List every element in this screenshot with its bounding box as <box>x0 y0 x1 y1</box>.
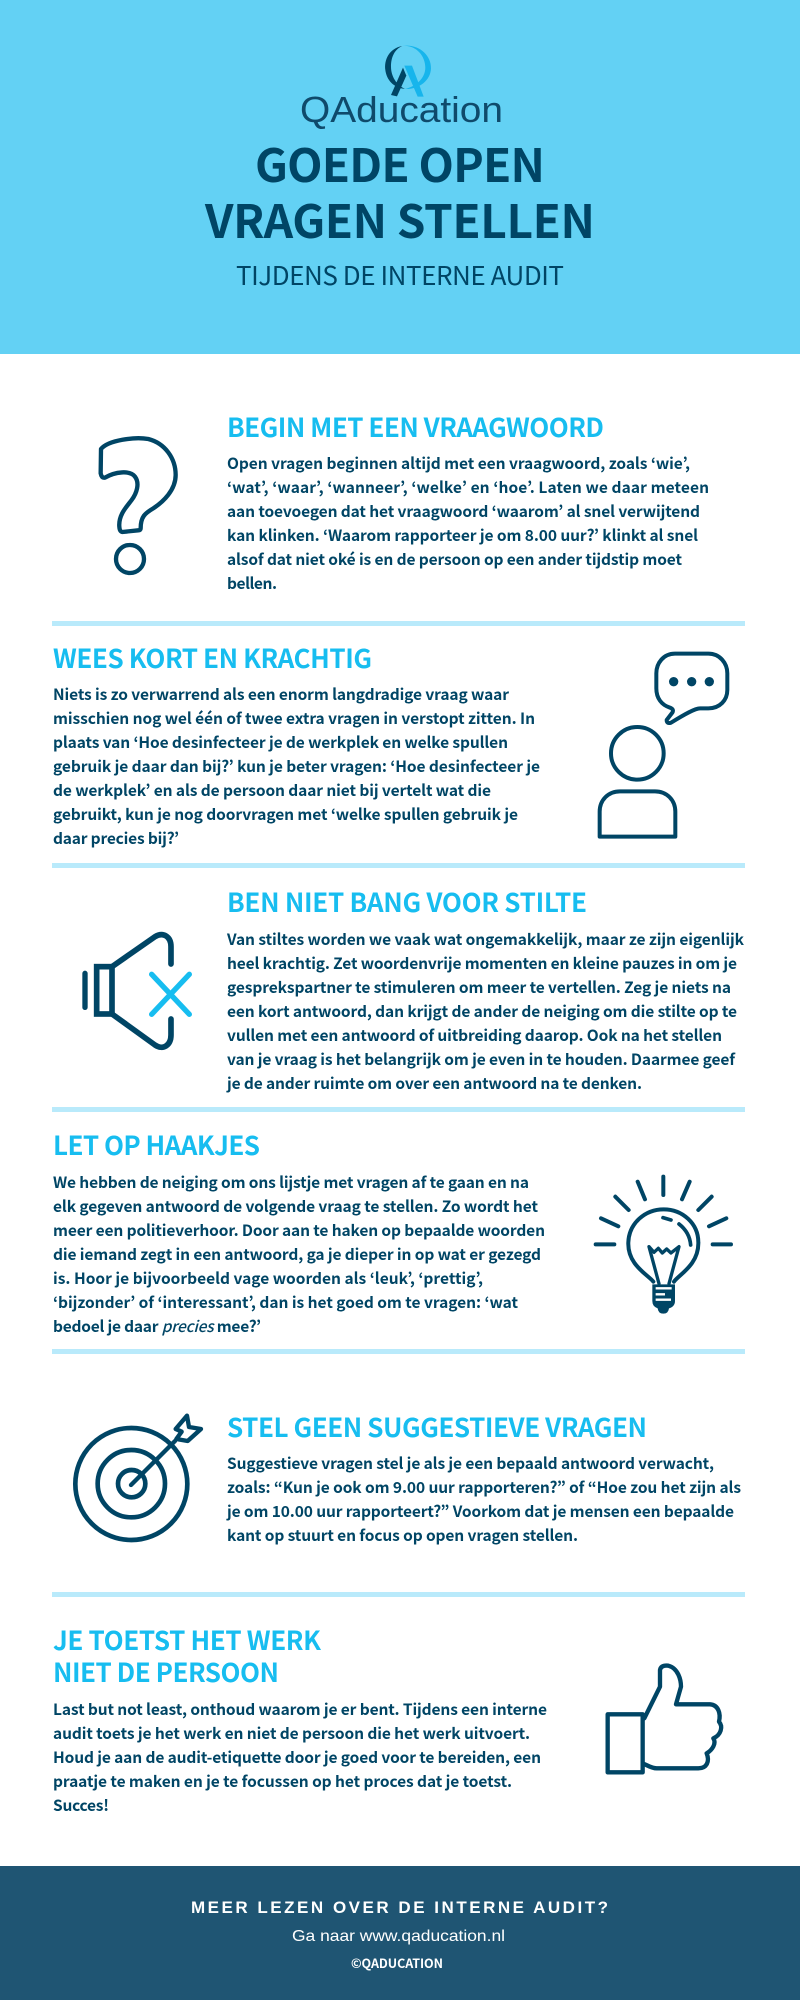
body text: Niets is zo verwarrend als een enorm langdradige vraag waar <box>53 683 509 705</box>
body text: audit toets je het werk en niet de persoon die het werk uitvoert. <box>53 1722 530 1744</box>
title <box>204 130 595 252</box>
body text: zoals: “Kun je ook om 9.00 uur rapporteren?” of “Hoe zou het zijn als <box>227 1476 741 1498</box>
heading <box>53 1621 321 1690</box>
icon: target with arrow <box>75 1416 201 1540</box>
body text: ‘bijzonder’ of ‘interessant’, dan is het goed om te vragen: ‘wat <box>53 1291 518 1313</box>
body text: alsof dat niet oké is en de persoon op een ander tijdstip moet <box>227 548 682 570</box>
body text: ‘wat’, ‘waar’, ‘wanneer’, ‘welke’ en ‘hoe’. Laten we daar meteen <box>227 476 709 498</box>
body text: van je vraag is het belangrijk om je even in te houden. Daarmee geef <box>227 1048 736 1070</box>
body text: meer een politieverhoor. Door aan te haken op bepaalde woorden <box>53 1219 545 1241</box>
body text: kan klinken. ‘Waarom rapporteer je om 8.00 uur?’ klinkt al snel <box>227 524 698 546</box>
body text: een kort antwoord, dan krijgt de ander de neiging om die stilte op te <box>227 1000 737 1022</box>
body text <box>53 683 540 849</box>
body text: Suggestieve vragen stel je als je een bepaald antwoord verwacht, <box>227 1452 714 1474</box>
title: VRAGEN STELLEN <box>204 186 595 252</box>
body text: de werkplek’ en als de persoon daar niet bij vertelt wat die <box>53 779 491 801</box>
body text: je om 10.00 uur rapporteert?” Voorkom dat je mensen een bepaalde <box>226 1500 734 1522</box>
body text: Open vragen beginnen altijd met een vraagwoord, zoals ‘wie’, <box>227 452 690 474</box>
heading: NIET DE PERSOON <box>53 1653 279 1690</box>
heading: BEN NIET BANG VOOR STILTE <box>227 883 587 920</box>
heading: LET OP HAAKJES <box>53 1126 260 1163</box>
icon: thumbs up <box>608 1666 721 1772</box>
body text: je de ander ruimte om over een antwoord na te denken. <box>226 1072 642 1094</box>
subtitle: TIJDENS DE INTERNE AUDIT <box>236 256 564 293</box>
body text: Succes! <box>53 1794 109 1816</box>
icon: muted speaker <box>85 935 189 1047</box>
panel: stel geen suggestieve vragen <box>75 1408 741 1546</box>
panel: header <box>0 0 800 354</box>
body text: plaats van ‘Hoe desinfecteer je de werkplek en welke spullen <box>53 731 508 753</box>
body text: elk gegeven antwoord de volgende vraag te stellen. Zo wordt het <box>53 1195 538 1217</box>
panel: wees kort en krachtig <box>53 639 727 849</box>
icon: question mark <box>101 438 176 573</box>
title: GOEDE OPEN <box>255 130 545 196</box>
body text <box>53 1698 547 1816</box>
body text: Houd je aan de audit-etiquette door je goed voor te bereiden, een <box>53 1746 541 1768</box>
body text: praatje te maken en je te focussen op het proces dat je toetst. <box>53 1770 512 1792</box>
body text: Last but not least, onthoud waarom je er bent. Tijdens een interne <box>53 1698 547 1720</box>
panel: je toetst het werk niet de persoon <box>53 1621 721 1816</box>
body text: daar precies bij?’ <box>53 827 179 849</box>
body text: aan toevoegen dat het vraagwoord ‘waarom’ al snel verwijtend <box>227 500 700 522</box>
panel: begin met een vraagwoord <box>101 408 709 594</box>
body text: Van stiltes worden we vaak wat ongemakkelijk, maar ze zijn eigenlijk <box>226 928 745 950</box>
body text: We hebben de neiging om ons lijstje met vragen af te gaan en na <box>53 1171 529 1193</box>
heading: STEL GEEN SUGGESTIEVE VRAGEN <box>227 1408 647 1445</box>
logo: QAducation: QAducation <box>300 89 503 130</box>
heading: WEES KORT EN KRACHTIG <box>53 639 372 676</box>
body text <box>53 1171 545 1337</box>
panel: ben niet bang voor stilte <box>85 883 745 1094</box>
body text: die iemand zegt in een antwoord, ga je dieper in op wat er gezegd <box>53 1243 541 1265</box>
body text: bellen. <box>227 572 277 594</box>
body text: kant op stuurt en focus op open vragen stellen. <box>227 1524 578 1546</box>
body text: misschien nog wel één of twee extra vragen in verstopt zitten. In <box>53 707 535 729</box>
icon: light bulb <box>596 1177 731 1314</box>
body text: heel krachtig. Zet woordenvrije momenten en kleine pauzes in om je <box>227 952 737 974</box>
body text: gesprekspartner te stimuleren om meer te vertellen. Zeg je niets na <box>227 976 731 998</box>
copyright: ©QADUCATION <box>351 1953 443 1972</box>
panel: let op haakjes <box>53 1126 731 1337</box>
heading: JE TOETST HET WERK <box>53 1621 321 1658</box>
body text: gebruik je daar dan bij?’ kun je beter vragen: ‘Hoe desinfecteer je <box>53 755 540 777</box>
body text: is. Hoor je bijvoorbeeld vage woorden als ‘leuk’, ‘prettig’, <box>53 1267 483 1289</box>
body text: vullen met een antwoord of uitbreiding daarop. Ook na het stellen <box>227 1024 722 1046</box>
footer link: Ga naar www.qaducation.nl <box>292 1928 505 1945</box>
body text <box>226 928 745 1094</box>
icon: person with speech bubble <box>600 654 727 837</box>
body text: bedoel je daar precies mee?’ <box>53 1315 261 1337</box>
heading: BEGIN MET EEN VRAAGWOORD <box>227 408 604 445</box>
panel: footer <box>0 1866 800 2000</box>
body text <box>226 1452 741 1546</box>
body text: gebruikt, kun je nog doorvragen met ‘welke spullen gebruik je <box>53 803 518 825</box>
body text <box>227 452 709 594</box>
logo: QAducation <box>300 46 503 130</box>
footer heading: MEER LEZEN OVER DE INTERNE AUDIT? <box>191 1898 608 1917</box>
